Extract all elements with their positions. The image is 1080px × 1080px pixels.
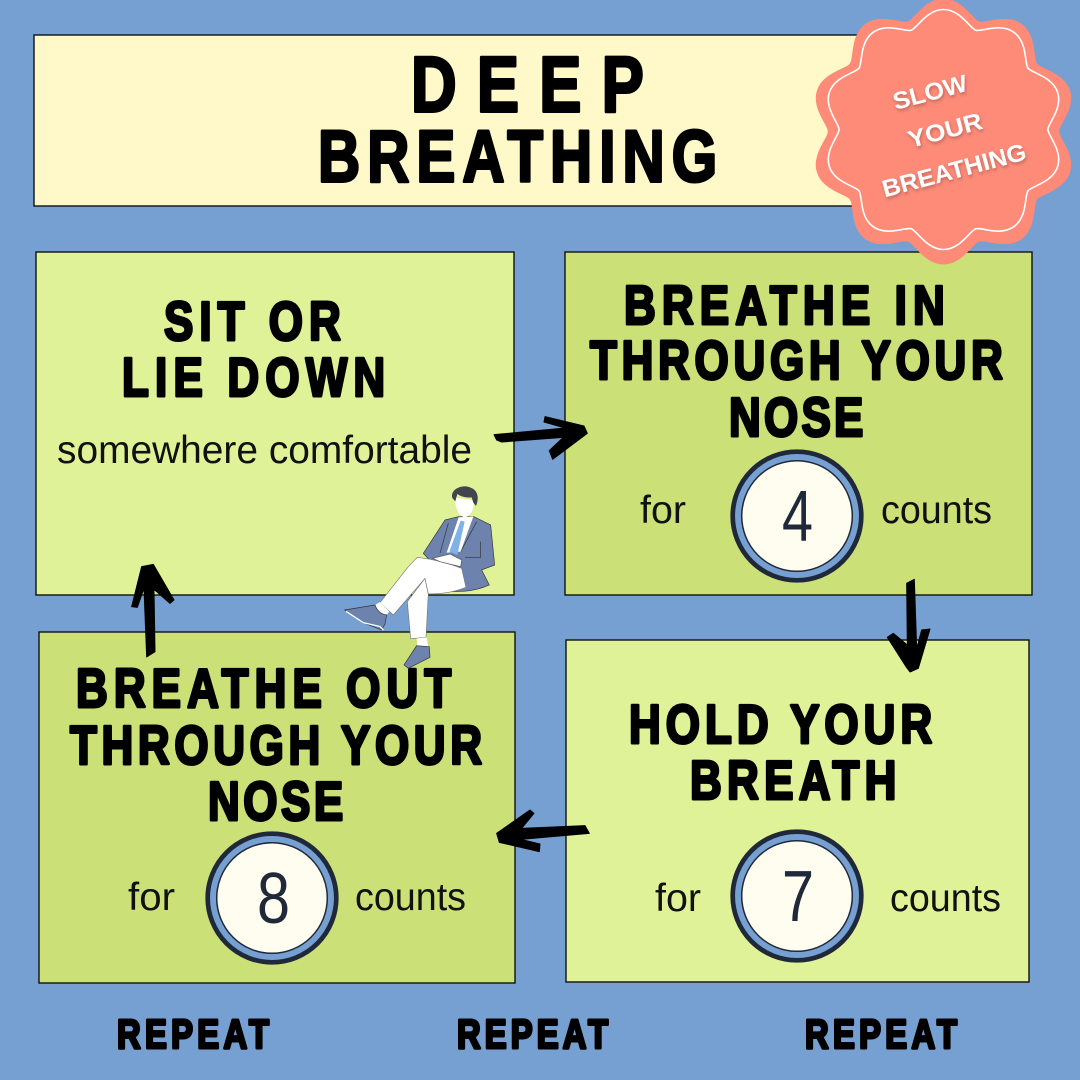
- badge text: YOUR: [905, 108, 985, 154]
- panel: hold your breath: [566, 640, 1029, 982]
- text: somewhere comfortable: somewhere comfortable: [57, 429, 472, 472]
- heading: breathe out through your nose: BREATHE OUT: [76, 657, 451, 719]
- jacket: [423, 517, 495, 592]
- heading: breathe out through your nose: NOSE: [208, 770, 343, 832]
- heading: breathe out through your nose: [70, 657, 482, 832]
- heading: hold your breath: BREATH: [690, 749, 896, 811]
- footer: repeat 3: REPEAT: [805, 1010, 957, 1057]
- head: [452, 486, 478, 518]
- footer: repeat 1: REPEAT: [117, 1010, 269, 1057]
- footer: repeat 2: REPEAT: [457, 1010, 608, 1057]
- trousers: [380, 557, 466, 639]
- count circle: 4: 4: [782, 477, 813, 557]
- badge text: SLOW: [890, 70, 971, 116]
- left shoe: [345, 602, 389, 630]
- heading: hold your breath: [629, 693, 932, 811]
- text: for: for: [640, 489, 686, 532]
- heading: breathe in through your nose: BREATHE IN: [624, 274, 945, 336]
- count circle: 7: 7: [782, 857, 814, 937]
- badge text: BREATHING: [879, 139, 1029, 203]
- badge inner outline: [819, 9, 1068, 249]
- text: for: for: [655, 877, 701, 920]
- text: counts: counts: [355, 876, 466, 919]
- count circle: 8: [208, 834, 336, 962]
- count circle: 4: [733, 452, 861, 580]
- title banner: [34, 35, 874, 206]
- heading: breathe in through your nose: NOSE: [729, 386, 863, 448]
- heading: breathe in through your nose: [590, 274, 1003, 448]
- arrow: step 3 to step 4: [497, 810, 589, 852]
- illustration: seated man: [345, 486, 495, 668]
- title: breathing: BREATHING: [318, 116, 717, 198]
- heading: sit or lie down: SIT OR: [164, 290, 341, 352]
- count circle: 7: [733, 832, 861, 960]
- heading: breathe in through your nose: THROUGH YOUR: [590, 329, 1003, 391]
- count circle: 8: 8: [257, 859, 290, 939]
- panel: sit or lie down: [36, 252, 514, 595]
- arrow: step 4 to step 1: [132, 564, 174, 657]
- text: counts: counts: [881, 489, 992, 532]
- heading: hold your breath: HOLD YOUR: [629, 693, 932, 755]
- shirt and tie: [447, 517, 473, 555]
- heading: sit or lie down: LIE DOWN: [122, 346, 385, 408]
- heading: breathe out through your nose: THROUGH YOUR: [70, 714, 482, 776]
- panel: breathe in: [565, 252, 1032, 595]
- text: counts: counts: [890, 877, 1001, 920]
- arrow: step 1 to step 2: [494, 417, 587, 459]
- hands: [433, 554, 462, 567]
- badge text: [879, 70, 1029, 203]
- panel: breathe out: [39, 632, 515, 983]
- arrow: step 2 to step 3: [887, 579, 930, 672]
- badge: slow your breathing: [806, 0, 1080, 264]
- text: for: for: [128, 876, 175, 919]
- heading: sit or lie down: [122, 290, 385, 408]
- title: deep: D E E P: [411, 41, 644, 129]
- right shoe: [404, 637, 430, 668]
